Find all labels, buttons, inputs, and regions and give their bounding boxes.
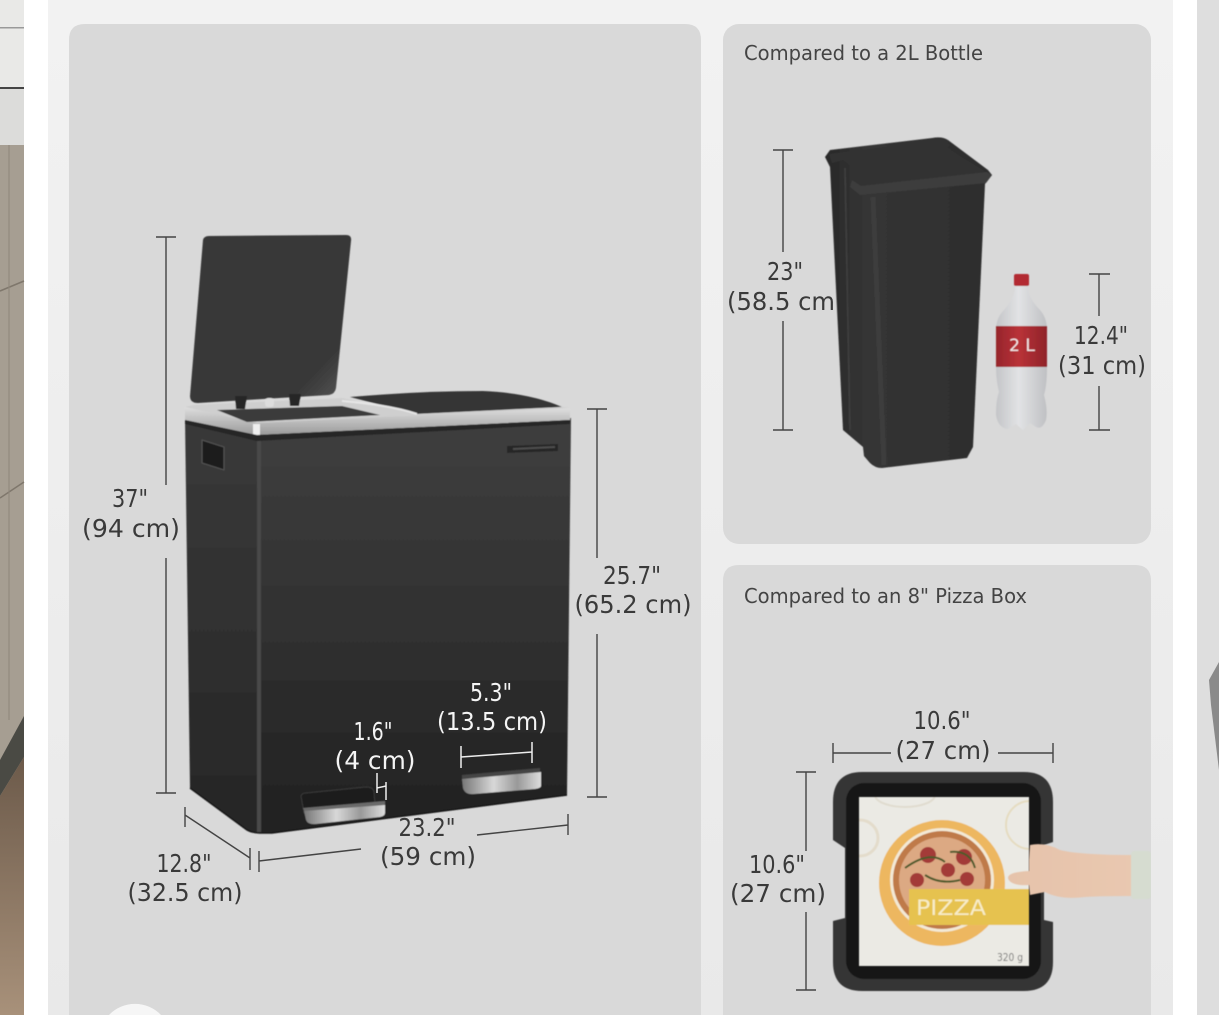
hinges (235, 394, 301, 409)
dimension: depth 12.8 in: 12.8" (156, 849, 212, 878)
dimension: bucket width 10.6 in: 10.6" (914, 706, 970, 735)
right pedal (462, 768, 541, 794)
open lid (190, 235, 351, 403)
dimension: inner bucket height 23 in: 23" (767, 257, 803, 286)
brand plate (507, 444, 558, 453)
dimension: width 23.2 in: 23.2" (398, 813, 456, 842)
hand holding the box (1008, 844, 1151, 899)
panel: compared to a pizza box (723, 565, 1151, 1015)
dimension: bottle height 12.4 in: (31 cm) (1058, 351, 1146, 380)
dimension: width 23.2 in (259, 813, 568, 872)
panel: compared to a 2L bottle (723, 24, 1151, 544)
dimension: pedal width 5.3 in (437, 678, 547, 768)
inner bucket (825, 137, 992, 468)
dimension: height 37 in: (94 cm) (82, 514, 180, 543)
pizza box (858, 796, 1030, 967)
heading: pizza box comparison: Compared to an 8" Pizza Box (744, 584, 1027, 608)
dimension: bucket depth 10.6 in: 10.6" (749, 850, 805, 879)
background photo: neighbouring kitchen slide (0, 0, 24, 1015)
side handle (202, 440, 224, 470)
dimension: height 37 in (82, 237, 180, 793)
dimension: pedal depth 1.6 in (334, 717, 416, 800)
dimension: pedal depth 1.6 in: 1.6" (354, 717, 392, 746)
dimension: pedal width 5.3 in: (13.5 cm) (437, 707, 547, 736)
dimension: bucket depth 10.6 in (730, 772, 826, 990)
dual trash bin (185, 235, 571, 833)
bin body front (257, 418, 571, 833)
pizza label (909, 889, 1029, 925)
dimension: body height 25.7 in: (65.2 cm) (574, 590, 692, 619)
dimension: bucket width 10.6 in: (27 cm) (896, 736, 990, 765)
right closed lid (350, 391, 562, 414)
dimension: bucket depth 10.6 in: (27 cm) (730, 879, 826, 908)
dimension: pedal depth 1.6 in: (4 cm) (334, 746, 416, 775)
dimension: inner bucket height 23 in: (58.5 cm (727, 287, 835, 316)
dimension: inner bucket height 23 in (727, 150, 835, 430)
dimension: bottle height 12.4 in: 12.4" (1074, 321, 1128, 350)
pizza box: 320 g (997, 951, 1023, 964)
dimension: bucket width 10.6 in (833, 706, 1053, 765)
dimension: depth 12.8 in (128, 807, 250, 907)
left pedal (301, 787, 385, 824)
dimension: pedal width 5.3 in: 5.3" (470, 678, 512, 707)
bucket seen from above (833, 772, 1053, 991)
dimension: depth 12.8 in: (32.5 cm) (128, 878, 242, 907)
inner opening (217, 406, 380, 422)
floor shadow line (190, 788, 567, 833)
panel: main bin dimensions (69, 24, 701, 1015)
white round badge at bottom (109, 1004, 161, 1015)
dimension: width 23.2 in: (59 cm) (380, 842, 476, 871)
dimension: height 37 in: 37" (112, 484, 148, 513)
2L soda bottle: 2 L (1009, 336, 1036, 356)
steel rim (185, 398, 570, 441)
dimension: bottle height 12.4 in (1058, 274, 1146, 430)
pizza box: PIZZA (916, 896, 987, 920)
bin body side (185, 418, 262, 833)
2L soda bottle (996, 274, 1047, 430)
background: next slide at right edge (1197, 0, 1219, 1015)
dimension: body height 25.7 in (574, 409, 692, 797)
dimension: body height 25.7 in: 25.7" (603, 561, 661, 590)
heading: 2L bottle comparison: Compared to a 2L Bottle (744, 41, 983, 65)
